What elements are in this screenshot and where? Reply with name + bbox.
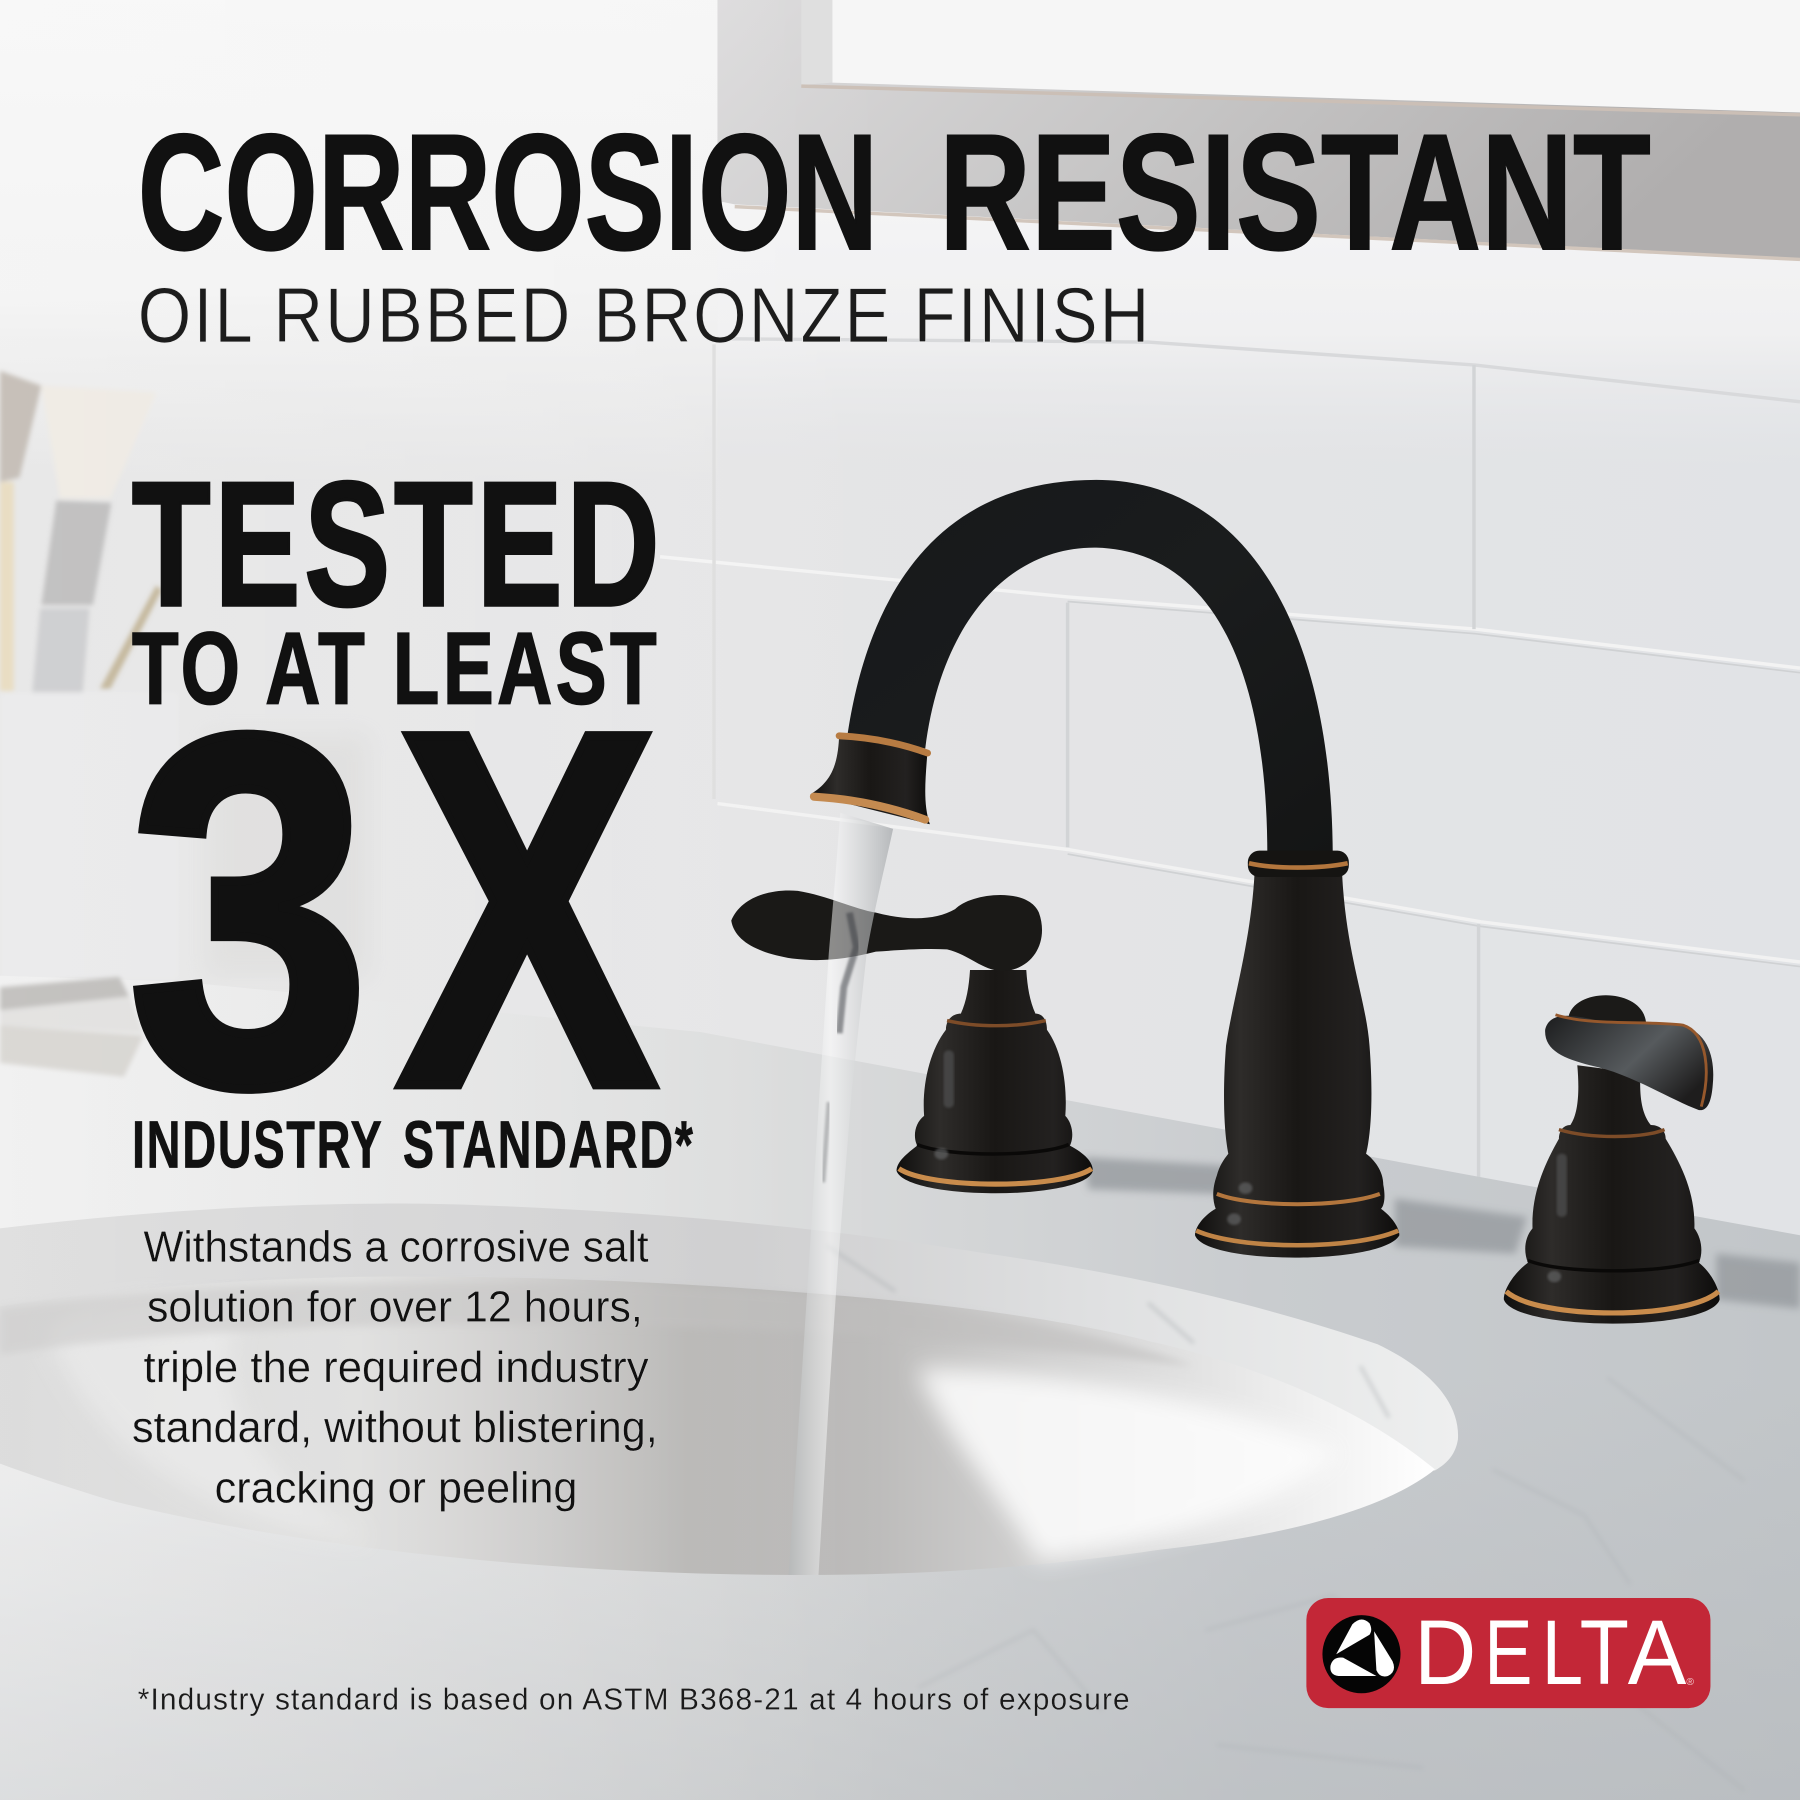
- spout gooseneck: [847, 480, 1333, 855]
- body description: triple the required industry: [143, 1344, 649, 1392]
- logo wordmark: L: [1542, 1602, 1583, 1704]
- sink rim: [0, 1204, 1458, 1471]
- marble veins: [918, 1378, 1745, 1791]
- body description: standard, without blistering,: [132, 1404, 658, 1452]
- title: CORROSION: [138, 100, 878, 285]
- registered mark: ®: [1686, 1677, 1694, 1688]
- title: [138, 100, 1651, 285]
- body description: Withstands a corrosive salt: [143, 1224, 649, 1272]
- left handle: [731, 890, 1093, 1193]
- logo wordmark: T: [1580, 1602, 1629, 1704]
- mirror frame: [717, 0, 1800, 259]
- claim line: to at least: TO AT LEAST: [132, 612, 660, 726]
- claim line: industry standard: STANDARD*: [403, 1108, 695, 1182]
- Delta logo: [1306, 1598, 1710, 1708]
- claim figure: 3X: 3: [127, 632, 371, 1191]
- handle lever: [731, 890, 1042, 971]
- claim line: industry standard: [132, 1108, 695, 1182]
- faucet shadows: [1085, 1157, 1800, 1309]
- footnote: *Industry standard is based on ASTM B368-21 at 4 hours of exposure: [138, 1681, 1131, 1716]
- logo wordmark: [1414, 1602, 1687, 1704]
- claim figure: 3X: [127, 626, 660, 1193]
- handle lever: [1545, 1016, 1713, 1110]
- claim block: tested to at least 3X industry standard: [127, 446, 695, 1193]
- background items: brushes, cup and compact: [0, 371, 178, 979]
- spout nozzle: [810, 735, 930, 824]
- logo wordmark: E: [1484, 1602, 1533, 1704]
- claim figure: 3X: X: [396, 626, 660, 1193]
- logo wordmark: A: [1628, 1602, 1687, 1704]
- countertop: [0, 976, 1800, 1800]
- handle body: [1504, 1065, 1720, 1324]
- body description: cracking or peeling: [215, 1465, 577, 1513]
- handle body: [897, 970, 1093, 1193]
- compact case: [0, 977, 143, 1077]
- tile grout lines: [660, 339, 1800, 1180]
- body description: solution for over 12 hours,: [147, 1283, 643, 1331]
- claim line: tested: TESTED: [132, 446, 664, 643]
- right handle: [1504, 995, 1720, 1324]
- faucet: [731, 480, 1720, 1575]
- center pillar: [1195, 851, 1399, 1258]
- claim line: industry standard: INDUSTRY: [132, 1108, 383, 1182]
- icon: delta triangle mark: [1322, 1615, 1401, 1693]
- logo wordmark: D: [1414, 1602, 1476, 1704]
- subtitle: OIL RUBBED BRONZE FINISH: [138, 271, 1151, 359]
- handle knob: [1568, 995, 1646, 1024]
- water stream: [789, 813, 893, 1575]
- body description: [132, 1224, 658, 1513]
- sink basin: [0, 1277, 1435, 1575]
